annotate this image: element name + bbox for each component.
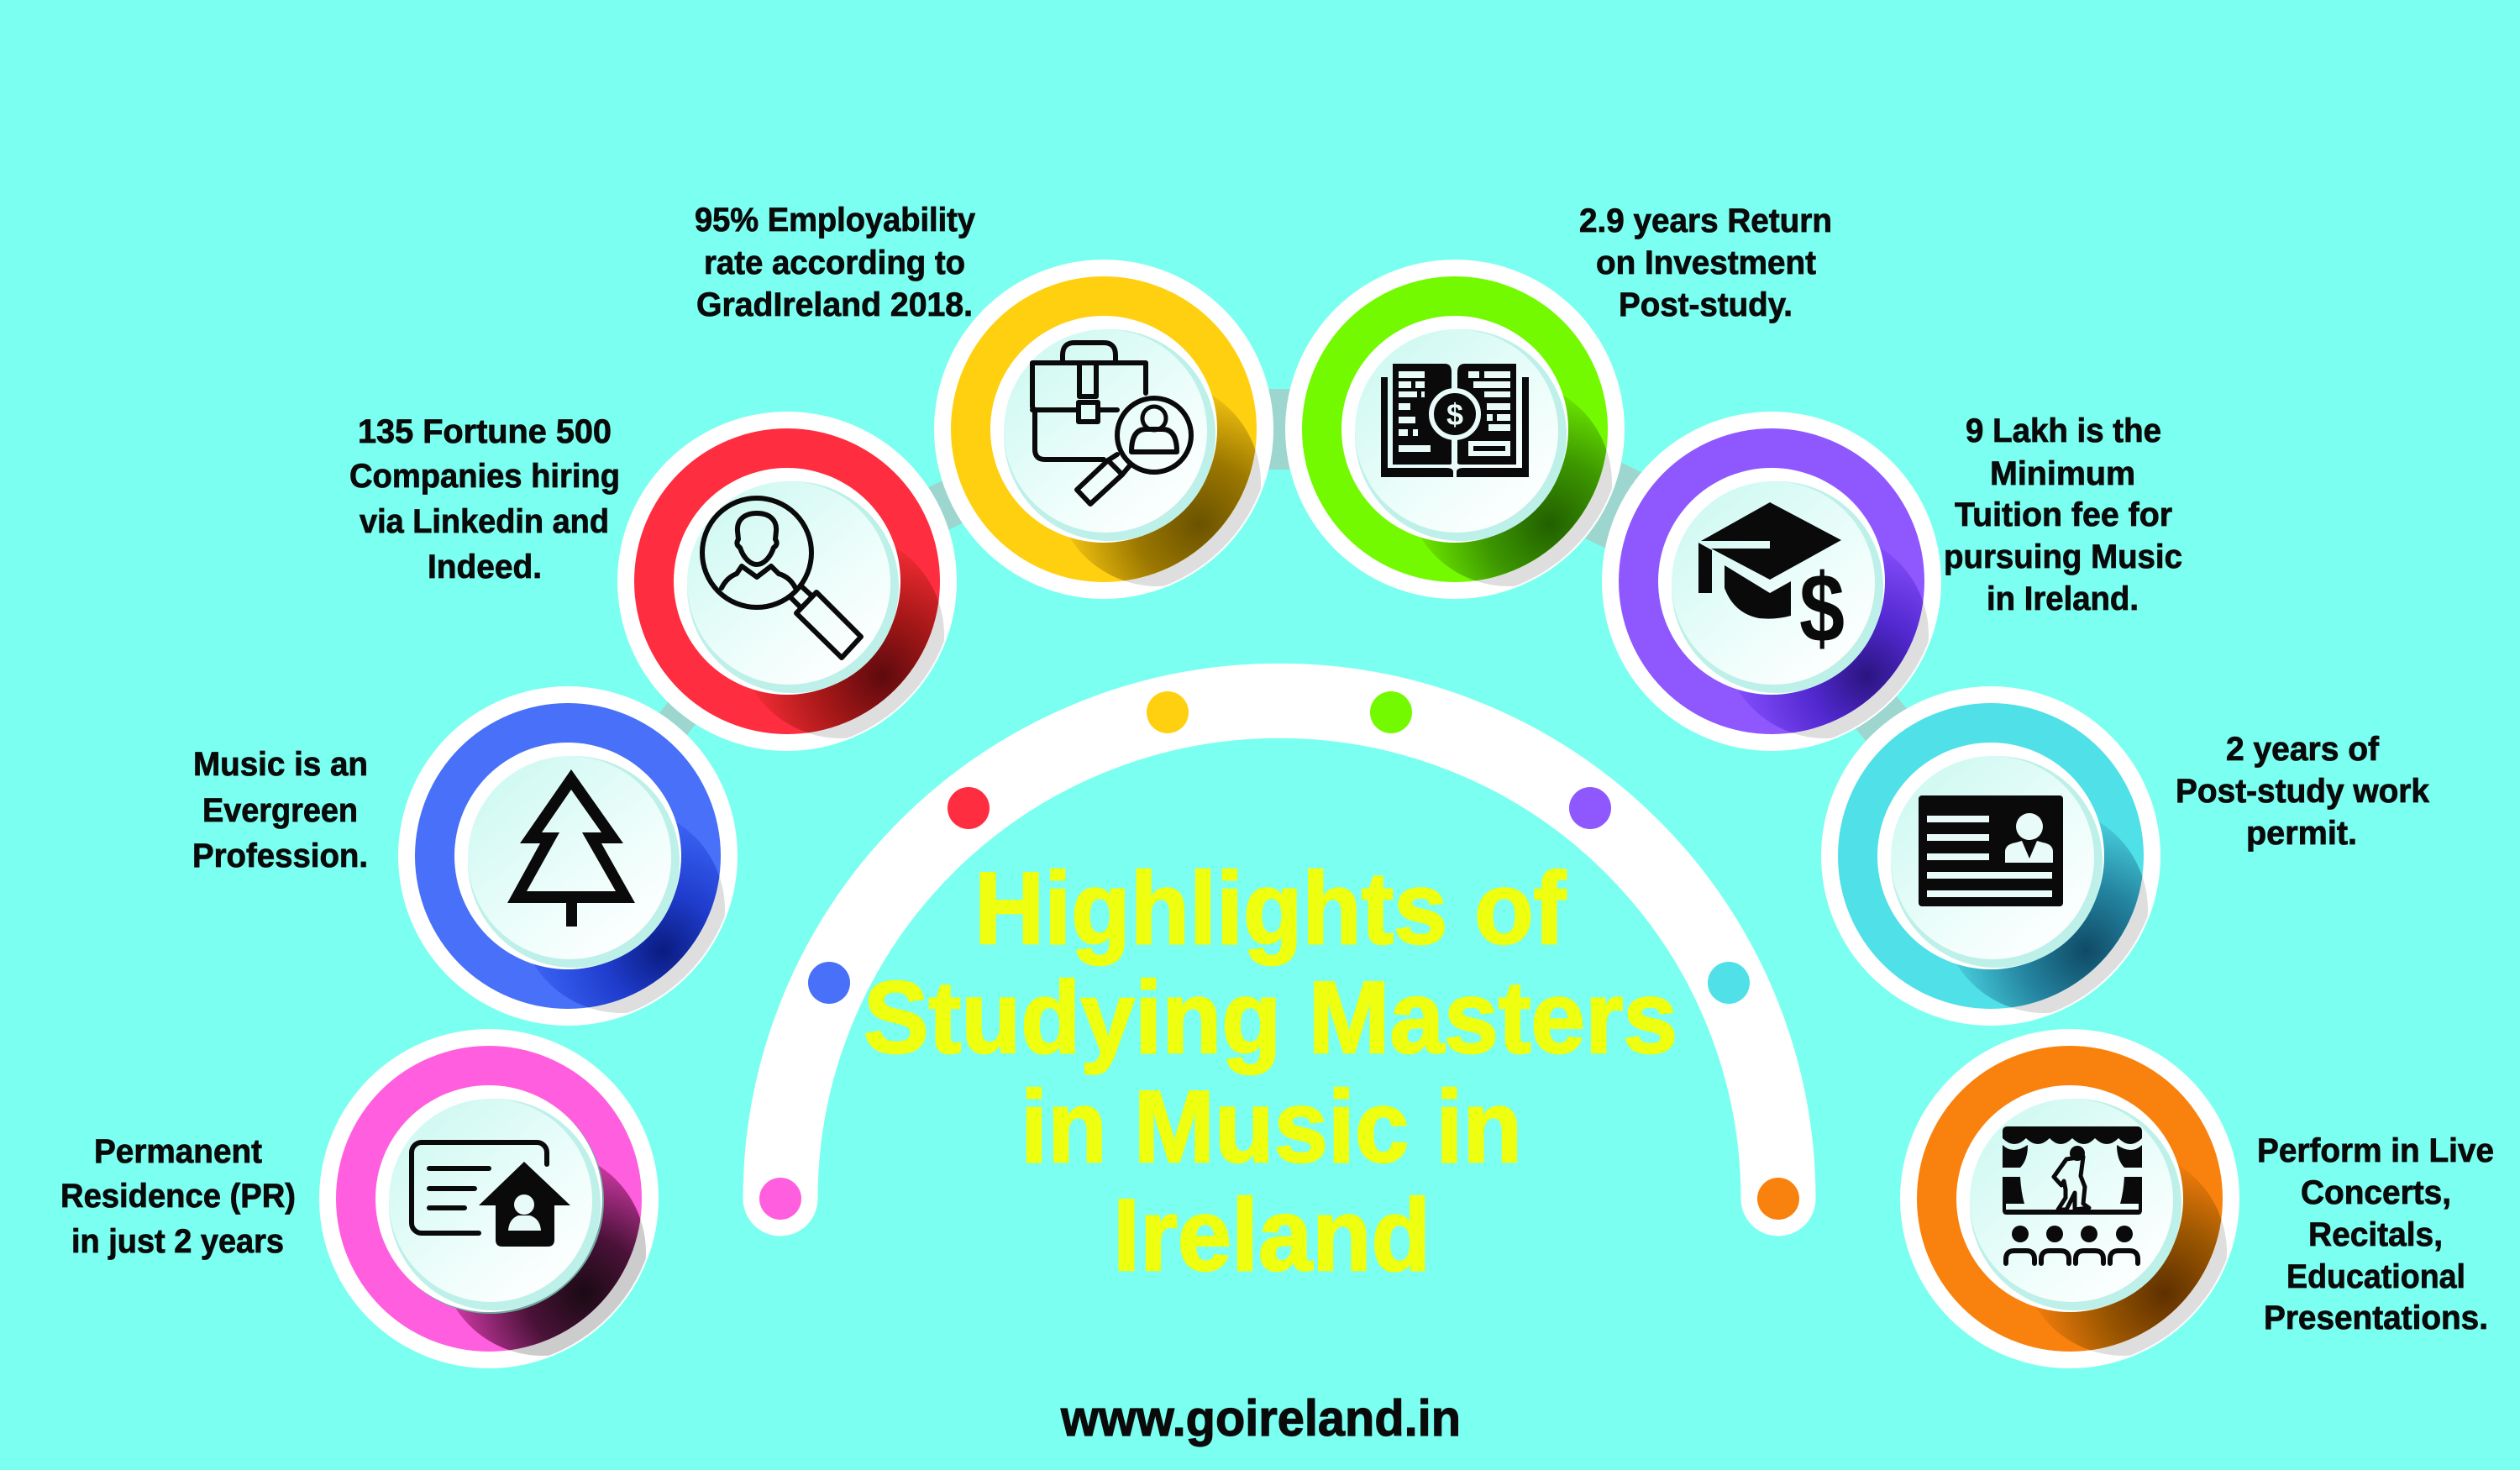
icon: graduation cap with dollar: $: [1799, 554, 1845, 663]
connectors between circles: [568, 429, 1991, 856]
caption: tuition fee: 9 Lakh is the: [1966, 412, 2161, 449]
icon: open book with dollar: $: [1446, 397, 1463, 432]
circle: yellow, employability: [934, 260, 1273, 599]
title: [864, 851, 1677, 1292]
caption: live performance: Concerts,: [2301, 1174, 2451, 1211]
caption: live performance: Presentations.: [2264, 1299, 2488, 1336]
circle: green, return on investment: [1285, 260, 1625, 599]
caption: return on investment: Post-study.: [1619, 286, 1793, 323]
caption: fortune 500: Companies hiring: [349, 458, 620, 495]
icon: permit card: [1919, 795, 2063, 906]
caption: employability: 95% Employability: [695, 202, 976, 239]
caption: permanent residence: Residence (PR): [60, 1178, 296, 1215]
caption: fortune 500: [349, 413, 620, 585]
white arc track: [780, 701, 1778, 1199]
caption: employability: [695, 202, 976, 323]
icon: id card with house: [412, 1142, 570, 1247]
circle: purple, tuition fee: [1602, 412, 1941, 751]
caption: fortune 500: Indeed.: [428, 549, 542, 585]
caption: live performance: Perform in Live: [2257, 1132, 2494, 1169]
caption: live performance: [2257, 1132, 2494, 1336]
caption: work permit: 2 years of: [2226, 731, 2380, 768]
caption: tuition fee: [1944, 412, 2182, 617]
caption: tuition fee: pursuing Music: [1944, 538, 2182, 575]
caption: permanent residence: [60, 1133, 296, 1260]
caption: tuition fee: in Ireland.: [1987, 580, 2139, 617]
icon: stage with audience: [2003, 1126, 2142, 1263]
caption: permanent residence: in just 2 years: [71, 1223, 284, 1260]
caption: permanent residence: Permanent: [94, 1133, 262, 1170]
arc dots: [759, 691, 1799, 1220]
circle: red, fortune 500: [617, 412, 957, 751]
caption: fortune 500: via Linkedin and: [360, 503, 609, 540]
icon: graduation cap with dollar: [1698, 502, 1845, 663]
caption: live performance: Recitals,: [2308, 1216, 2443, 1253]
circle: pink, permanent residence: [319, 1029, 659, 1368]
caption: work permit: permit.: [2246, 815, 2357, 852]
title: Studying Masters: [864, 960, 1677, 1074]
caption: evergreen profession: Music is an: [193, 746, 368, 783]
caption: tuition fee: Minimum: [1990, 455, 2135, 492]
caption: evergreen profession: Evergreen: [202, 792, 358, 829]
caption: employability: GradIreland 2018.: [696, 286, 973, 323]
caption: return on investment: 2.9 years Return: [1579, 202, 1832, 239]
caption: evergreen profession: Profession.: [192, 837, 368, 874]
title: in Music in: [1021, 1069, 1522, 1184]
circle: blue, evergreen: [398, 686, 738, 1026]
caption: return on investment: on Investment: [1596, 244, 1816, 281]
caption: work permit: Post-study work: [2176, 773, 2430, 810]
caption: employability: rate according to: [704, 244, 965, 281]
icon: pine tree: [507, 769, 635, 927]
website footer: www.goireland.in: [1060, 1390, 1461, 1446]
title: Highlights of: [974, 851, 1566, 965]
caption: fortune 500: 135 Fortune 500: [358, 413, 612, 450]
circle: teal, work permit: [1821, 686, 2160, 1026]
icon: open book with dollar: [1381, 364, 1529, 477]
title: Ireland: [1113, 1178, 1431, 1292]
caption: evergreen profession: [192, 746, 368, 874]
circle: orange, live performance: [1900, 1029, 2239, 1368]
caption: return on investment: [1579, 202, 1832, 323]
caption: work permit: [2176, 731, 2430, 852]
icon: magnifier with person: [702, 498, 861, 658]
caption: live performance: Educational: [2286, 1258, 2465, 1295]
icon: briefcase with magnifier: [1032, 343, 1191, 504]
caption: tuition fee: Tuition fee for: [1955, 496, 2172, 533]
